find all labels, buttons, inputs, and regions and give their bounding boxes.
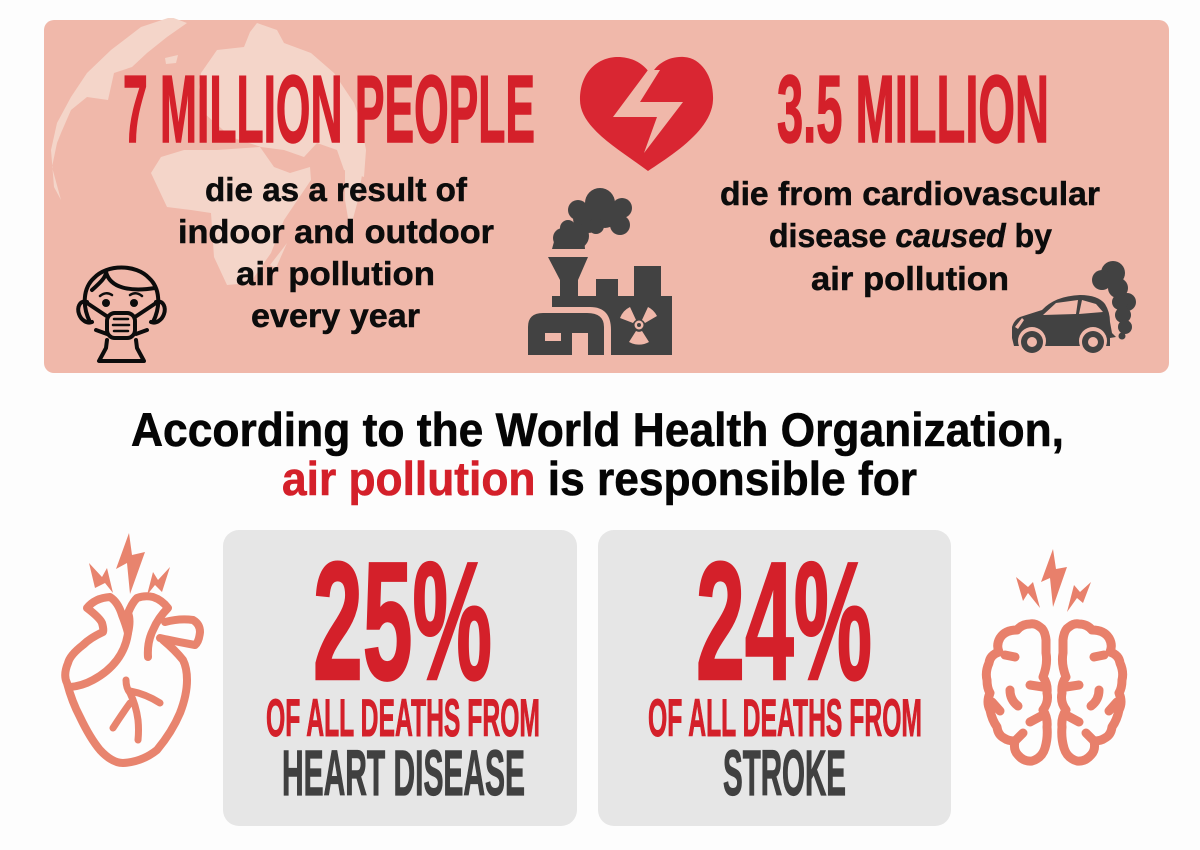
panel: stroke statistic	[598, 527, 951, 826]
text: die from cardiovascular disease caused by air pollution: disease caused by	[769, 217, 1053, 254]
panel: stroke statistic: STROKE	[723, 737, 846, 809]
panel: heart disease statistic: HEART DISEASE	[282, 737, 525, 809]
text: die from cardiovascular disease caused by air pollution: air pollution	[811, 260, 1009, 297]
heading: according to the World Health Organization	[131, 403, 1064, 505]
icon: broken heart	[580, 57, 713, 171]
text: die as a result of indoor and outdoor air pollution every year: air pollution	[236, 255, 435, 292]
number: 25 percent: 25%	[313, 527, 492, 715]
panel: heart disease statistic: OF ALL DEATHS FROM	[266, 689, 540, 748]
icon: car with exhaust smoke	[1012, 261, 1136, 355]
text: die as a result of indoor and outdoor air pollution every year: die as a result of	[205, 171, 468, 208]
text: die from cardiovascular disease caused by air pollution: die from cardiovascular	[720, 175, 1100, 212]
icon: globe	[51, 17, 366, 285]
number: 24 percent: 24%	[696, 527, 872, 715]
panel: top banner	[44, 17, 1169, 373]
icon: person wearing mask	[78, 268, 165, 361]
text: die as a result of indoor and outdoor air pollution every year: every year	[251, 297, 420, 334]
text: die as a result of indoor and outdoor air pollution every year	[178, 171, 494, 334]
text: die as a result of indoor and outdoor air pollution every year: indoor and outdoor	[178, 213, 494, 250]
text: die from cardiovascular disease caused by air pollution	[720, 175, 1100, 297]
icon: brain with lightning	[986, 549, 1123, 761]
panel: heart disease statistic	[223, 527, 577, 826]
icon: factory with smoke	[528, 188, 672, 355]
panel: top banner: 7 MILLION PEOPLE	[123, 56, 535, 163]
icon: anatomical heart with lightning	[65, 533, 200, 763]
heading: according to the World Health Organization: According to the World Health Organization,	[131, 403, 1064, 456]
heading: according to the World Health Organization: air pollution is responsible for	[282, 452, 917, 505]
